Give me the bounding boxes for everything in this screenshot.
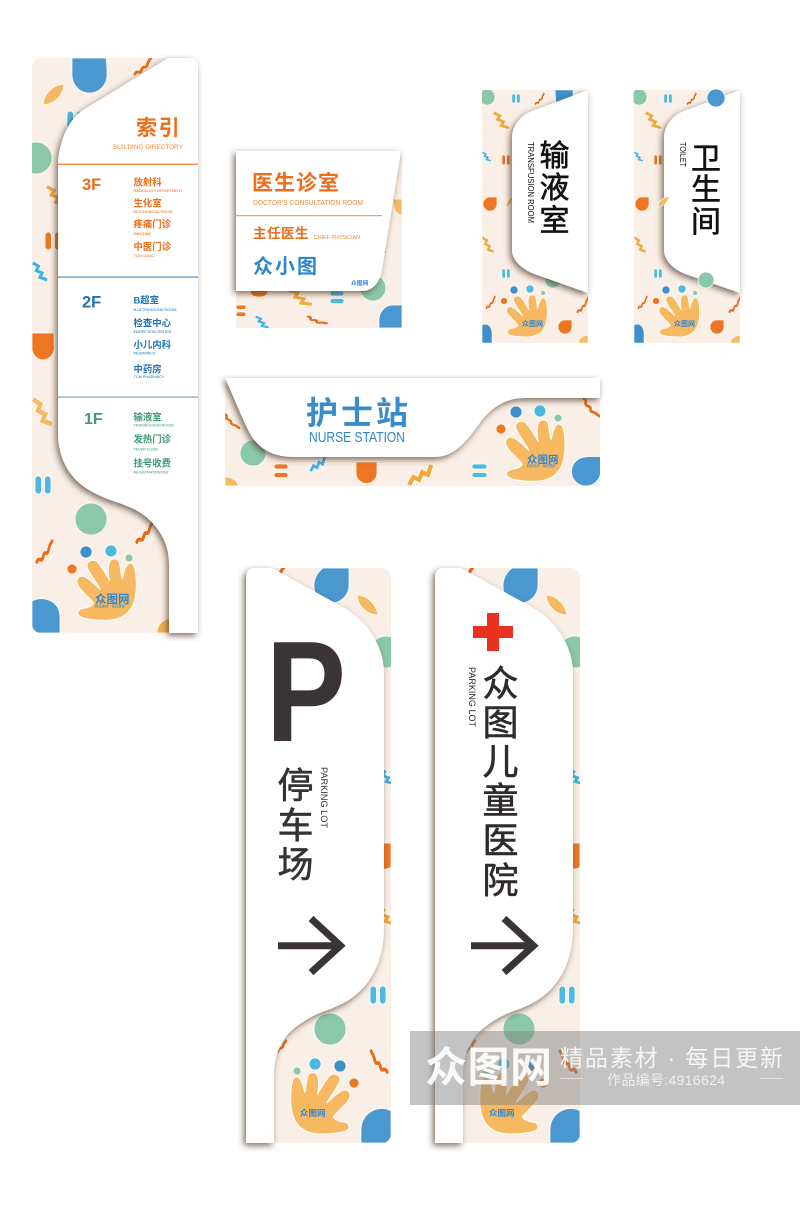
watermark banner: 众图网 [425,1044,552,1091]
nurse white board [225,378,600,457]
floor 1F listing: 发热门诊 [134,434,172,444]
floor 3F listing: PAIN CLINIC [134,231,152,236]
floor 3F listing: 放射科 [134,176,162,188]
floor 2F listing: INSPECTION CENTER [134,329,172,334]
hospital white board [435,568,573,1143]
toilet label: TOILET [678,142,688,167]
floor 2F listing: 小儿内科 [134,339,172,350]
floor 2F listing: B超室 [134,294,159,306]
directory logo: 精品素材 · 每日更新 [95,604,126,608]
toilet white board [664,90,740,293]
panel: parking lot sign [245,567,402,1143]
floor 3F listing: 疼痛门诊 [134,218,172,230]
floor 1F listing: FEVER CLINIC [134,446,159,452]
floor 2F listing: TCM PHARMACY [134,374,165,379]
icon: red cross [473,613,513,651]
floor 2F listing: PEDIATRICS [134,350,156,356]
floor 3F listing: RADIOLOGY DEPARTMENT [134,188,183,193]
parking pattern background [245,567,402,1143]
arrow: parking direction [278,918,342,972]
door sign pattern background [236,151,402,328]
toilet label: 卫 [691,143,721,176]
heading: directory title: 索引 [136,117,181,140]
parking P symbol: P [266,612,346,772]
watermark banner: 精品素材 · 每日更新 [560,1045,783,1071]
floor 3F listing: BIOCHEMICAL ROOM [134,209,172,214]
hospital name: 众 [482,663,519,704]
heading: directory title: BUILDING DIRECTORY [113,144,183,151]
parking label: 车 [277,805,314,846]
floor 3F listing: 生化室 [134,198,162,208]
parking label: PARKING LOT [319,767,329,828]
transfusion room label: TRANSFUSION ROOM [526,142,536,223]
nurse sign logo: 精品素材 · 每日更新 [527,463,556,468]
floor 2F listing: 中药房 [134,364,162,374]
hospital name: PARKING LOT [467,667,477,727]
directory pattern background [32,58,169,633]
panel: transfusion room sign [479,89,588,343]
transfusion sign pattern background [479,89,588,343]
floor 3F listing [58,164,198,258]
heading: directory title [113,117,183,151]
chief physician label [253,225,360,241]
nurse sign logo: 众图网 [527,454,558,466]
panel: doctor consultation door sign [236,151,402,328]
nurse station label: NURSE STATION [309,429,405,446]
transfusion white board [512,90,588,293]
toilet sign pattern background [631,89,740,343]
transfusion sign logo: 众图网 [522,320,543,328]
door sign logo: 众图网 [351,280,369,287]
floor 2F listing [58,276,198,379]
floor 3F listing: 中医门诊 [134,241,172,252]
toilet label [678,142,721,239]
arrow: hospital direction [471,918,535,972]
parking logo: 众图网 [300,1108,326,1118]
hospital pattern background [434,567,591,1143]
chief physician label: 主任医生 [253,225,309,241]
transfusion room label: 室 [540,205,570,238]
hospital name: 儿 [482,741,519,782]
floor 1F listing: 输液室 [134,412,162,422]
heading: doctor's consultation room [236,171,382,216]
transfusion room label: 液 [540,172,570,205]
panel: toilet sign [631,89,740,343]
nurse sign pattern background [224,378,600,486]
floor 2F listing: B-ULTRASOUND ROOM [134,307,176,312]
panel: building directory sign [20,58,198,633]
floor 3F listing: TCM CLINIC [134,253,155,258]
toilet sign logo: 众图网 [674,320,695,328]
hospital name: 医 [482,820,519,861]
parking label: 停 [277,765,314,806]
transfusion room label [526,140,570,238]
floor 1F listing: TRANSFUSION ROOM [134,422,174,428]
parking label: 场 [277,844,314,885]
watermark banner [410,1031,800,1105]
watermark banner: 作品编号:4916624 [607,1072,725,1088]
floor 1F listing: 1F [84,411,103,428]
panel: nurse station sign [224,378,600,486]
hospital name: 院 [482,860,519,901]
floor 2F listing: 检查中心 [134,318,172,328]
panel: hospital direction sign [434,567,591,1143]
floor 1F listing: REGISTRATION FEE [134,470,169,474]
floor 1F listing [58,396,198,474]
hospital name: 童 [482,780,519,821]
toilet label: 生 [691,174,721,207]
floor 2F listing: 2F [82,294,101,312]
parking label [277,765,329,885]
floor 3F listing: 3F [82,176,101,194]
directory logo: 众图网 [95,593,130,606]
directory white board [58,58,198,633]
door sign white board [236,151,401,291]
hospital name [467,663,519,901]
chief physician label: CHIEF PHYSICIAN [314,235,360,241]
floor 1F listing: 挂号收费 [134,458,172,468]
heading: doctor's consultation room: 医生诊室 [252,171,340,195]
hospital name: 图 [482,702,519,743]
toilet top circle, leaf and green circle [658,89,725,288]
nurse station label: 护士站 [306,395,411,431]
heading: doctor's consultation room: DOCTOR'S CONSULTATION ROOM [253,198,363,207]
parking white board [246,568,384,1143]
hospital sign logo: 众图网 [489,1108,515,1118]
toilet label: 间 [691,206,721,239]
doctor name: 众小图 [253,255,319,278]
transfusion room label: 输 [540,140,570,173]
